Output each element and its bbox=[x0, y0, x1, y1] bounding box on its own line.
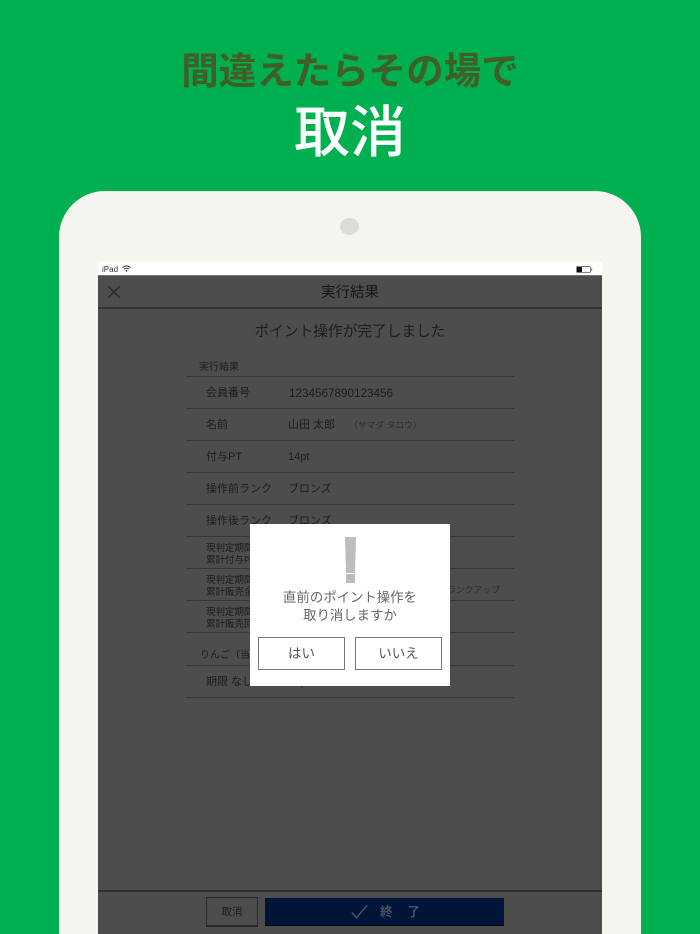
row: rank before: 操作前ランク bbox=[206, 483, 272, 495]
row: period sales amount bbox=[206, 574, 500, 598]
icon: exclamation bbox=[345, 537, 356, 583]
results table bbox=[186, 361, 514, 698]
cancel button: 取消 bbox=[222, 906, 242, 918]
row: no expiry bbox=[206, 676, 309, 688]
navigation title: 実行結果 bbox=[321, 285, 379, 301]
row: period sales amount: 累計販売金額 bbox=[206, 587, 263, 598]
icon: battery bbox=[576, 266, 592, 273]
row: period sales count: 累計販売回数 bbox=[206, 619, 263, 630]
row: name bbox=[206, 418, 422, 431]
row: name: （ヤマダ タロウ） bbox=[349, 420, 422, 430]
section: apple: りんご（当店） bbox=[200, 650, 270, 661]
completion message: ポイント操作が完了しました bbox=[255, 324, 445, 340]
row: period points: 累計付与PT bbox=[206, 555, 256, 566]
row: period sales count bbox=[206, 606, 263, 630]
row: granted points: 14pt bbox=[288, 451, 309, 463]
row: member number bbox=[206, 386, 393, 400]
screen bbox=[98, 262, 602, 934]
status label: iPad bbox=[102, 265, 118, 274]
button: no: いいえ bbox=[378, 646, 419, 661]
close icon bbox=[108, 286, 120, 298]
button: yes: はい bbox=[288, 646, 315, 661]
row: period points bbox=[206, 542, 256, 566]
row: rank after: ブロンズ bbox=[288, 515, 332, 527]
row: period sales count: 現判定期間 bbox=[206, 607, 254, 618]
dialog message bbox=[283, 590, 417, 622]
row: rank after bbox=[206, 514, 332, 527]
row: granted points bbox=[206, 450, 310, 463]
row: member number: 会員番号 bbox=[206, 387, 250, 399]
row: rank before bbox=[206, 482, 332, 495]
finish button bbox=[265, 898, 504, 926]
dialog bbox=[250, 524, 450, 686]
row: name: 名前 bbox=[206, 419, 228, 431]
navigation divider bbox=[98, 307, 602, 308]
finish label: 終了 bbox=[380, 905, 435, 919]
cancel button bbox=[206, 897, 258, 927]
status bar bbox=[98, 262, 602, 276]
row: no expiry: 期限 なし bbox=[206, 676, 253, 688]
button: yes bbox=[258, 637, 345, 670]
toolbar divider bbox=[98, 890, 602, 892]
table heading: 実行結果 bbox=[199, 362, 239, 373]
row: no expiry: 14pt bbox=[288, 676, 309, 688]
icon: wifi bbox=[122, 265, 131, 272]
row: period points: 現判定期間 bbox=[206, 543, 254, 554]
icon: check bbox=[352, 905, 368, 919]
row: granted points: 付与PT bbox=[206, 451, 242, 463]
row: rank after: 操作後ランク bbox=[206, 515, 272, 527]
row: period sales amount: 現判定期間 bbox=[206, 575, 254, 586]
tablet frame bbox=[59, 191, 641, 934]
button: no bbox=[355, 637, 442, 670]
heading: first line: 間違えたらその場で bbox=[181, 50, 519, 92]
row: member number: 1234567890123456 bbox=[289, 387, 393, 400]
dialog message: 直前のポイント操作を bbox=[283, 590, 417, 605]
heading: second line: 取消 bbox=[294, 101, 406, 164]
row: rank before: ブロンズ bbox=[288, 483, 332, 495]
row: period sales amount: ランクアップ bbox=[447, 585, 500, 595]
dialog message: 取り消しますか bbox=[303, 608, 397, 622]
icon: camera bbox=[340, 218, 359, 235]
row: name: 山田 太郎 bbox=[288, 419, 335, 431]
